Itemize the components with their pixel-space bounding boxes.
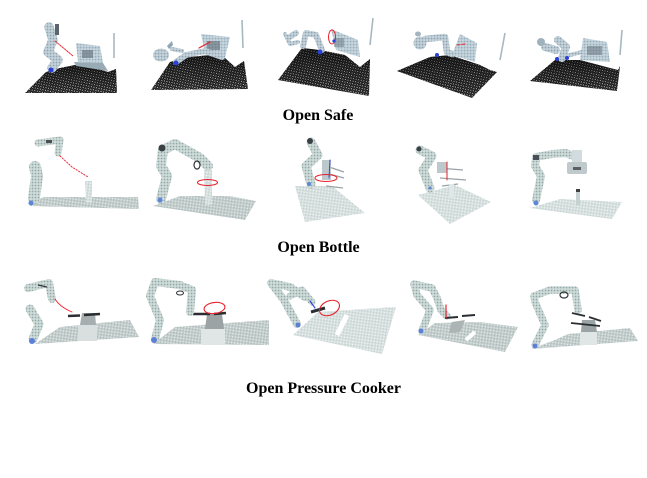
robot arm [161,144,208,199]
side stick [500,33,505,60]
bottle [204,170,212,205]
red ellipse and blue axis [315,174,337,182]
white slot [466,332,475,340]
side stick [620,30,622,55]
image: pressure cooker step 4 [414,284,518,352]
red ellipse [328,30,336,44]
safe [331,29,360,57]
table point cloud [153,196,256,220]
table point cloud [418,322,518,352]
side stick [113,33,115,58]
panel: open bottle image row [28,138,622,224]
table point cloud [531,328,638,349]
red trajectory [55,299,72,312]
title: open pressure cooker: Open Pressure Cooker [246,380,401,397]
table point cloud [530,199,622,219]
robot arm [288,33,296,38]
image: open safe step 3 [278,18,373,96]
red axis [446,162,448,180]
safe [76,43,103,63]
ground point cloud [25,65,117,93]
robot arm [535,153,576,200]
gripper [445,315,475,318]
safe [452,34,477,62]
red ellipse [203,301,226,315]
robot arm [176,51,222,62]
robot arm [558,40,566,58]
image: pressure cooker step 1 [28,283,139,344]
ground point cloud [278,48,370,96]
bottle [85,181,92,203]
robot arm [425,37,452,54]
image: open bottle step 2 [153,144,256,220]
image: open safe step 2 [151,20,248,90]
image: open safe step 5 [530,30,622,91]
red axis [445,305,447,318]
safe [580,38,610,62]
title: open bottle: Open Bottle [277,239,360,256]
table point cloud [418,185,491,224]
gripper and cooker [581,320,597,332]
robot arm [306,142,318,184]
image: open bottle step 3 [295,138,365,222]
image: pressure cooker step 5 [531,290,638,349]
panel: open safe image row [25,18,622,98]
white slot [337,315,347,335]
blue segment [310,301,315,308]
table point cloud [153,320,269,345]
gripper [311,308,325,312]
robot arm [414,284,447,331]
panel: open pressure cooker image row [28,282,638,354]
gripper [438,168,466,186]
gripper [572,150,582,162]
red dashes [457,44,465,45]
gripper [322,166,344,188]
side stick [242,20,243,48]
table point cloud [295,186,365,222]
red dotted trajectory [60,156,88,177]
bottle [576,190,580,205]
ground point cloud [530,60,620,91]
robot arm [150,282,192,339]
red ellipse [198,180,218,186]
robot arm [534,290,578,345]
safe [201,34,230,58]
image: pressure cooker step 3 [271,283,396,354]
cooker and gripper [205,314,224,329]
red trajectory [55,41,73,56]
cooker and gripper [80,313,96,325]
table point cloud [30,197,139,209]
robot arm [271,283,305,324]
image: open bottle step 5 [530,150,622,219]
title: open safe: Open Safe [283,107,353,124]
ground point cloud [397,55,497,98]
image: open bottle step 1 [28,140,139,209]
red ellipse [317,297,342,319]
image: open safe step 1 [25,24,117,93]
robot arm upper [28,283,52,299]
red arrow [199,42,210,48]
robot arm base [34,167,37,198]
bottle [449,184,454,198]
table point cloud [35,320,139,344]
robot arm [48,27,58,68]
ground point cloud [151,55,248,90]
robot arm base [30,309,39,339]
side stick [370,18,373,45]
image: open bottle step 4 [416,146,491,224]
table point cloud [293,307,396,354]
image: pressure cooker step 2 [150,282,269,345]
image: open safe step 4 [397,32,505,98]
robot arm [420,150,432,188]
robot arm upper [38,140,60,153]
